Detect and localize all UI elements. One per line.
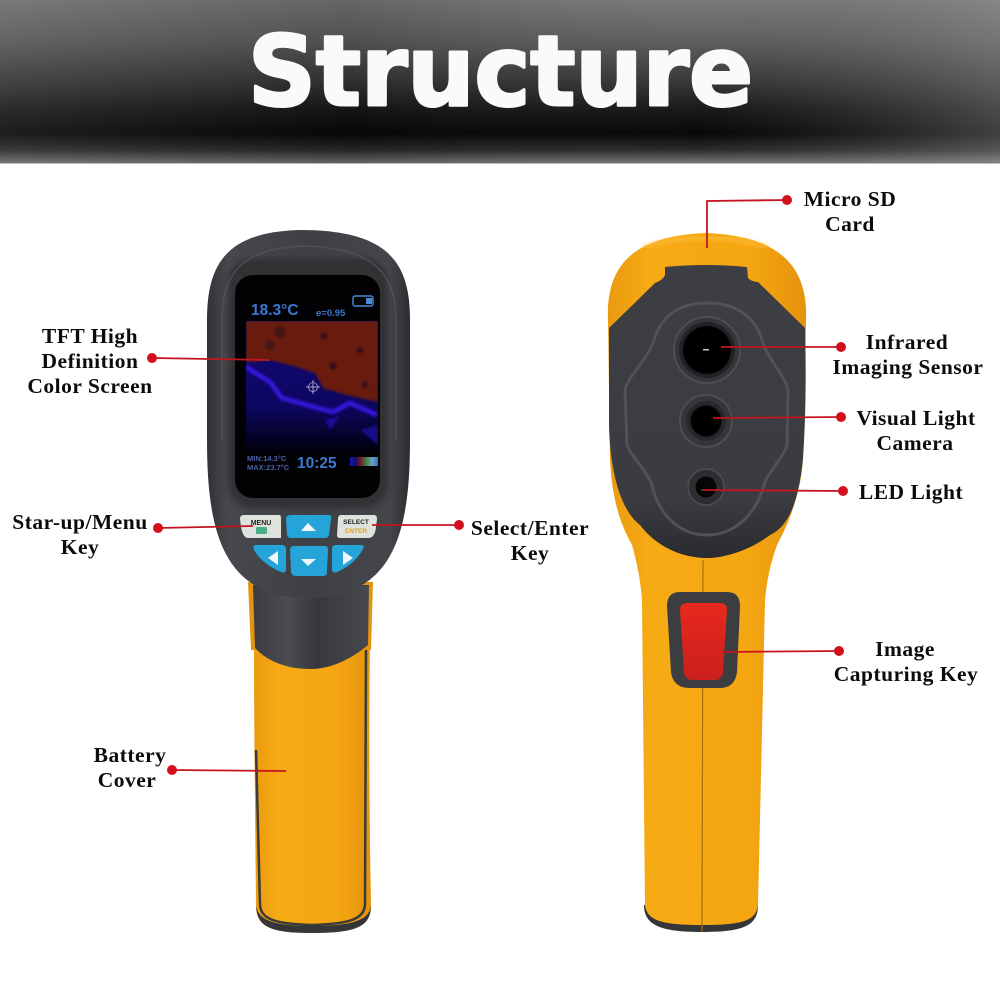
device: rear view [608, 233, 806, 932]
callout: select enter key: Key [511, 541, 549, 565]
visual light camera lens [680, 395, 732, 447]
callout: image capturing key: Image [875, 637, 935, 661]
image capturing key [667, 592, 740, 688]
menu key: MENU [251, 520, 271, 527]
callout: start-up menu key: Key [61, 535, 99, 559]
callout: infrared imaging sensor: Infrared [866, 330, 948, 354]
thermal image [246, 321, 378, 453]
min max readout [247, 454, 290, 472]
colour scale [350, 457, 378, 466]
callout: image capturing key [722, 637, 978, 686]
neck [253, 585, 369, 669]
callout: TFT screen: TFT High [42, 324, 138, 348]
clock: 10:25 [297, 455, 337, 472]
callout: select enter key: Select/Enter [471, 516, 589, 540]
callout: LED light: LED Light [859, 480, 963, 504]
callout: visual light camera: Camera [876, 431, 954, 455]
keypad [240, 515, 377, 576]
title: Structure [248, 15, 753, 128]
rear dark panel [609, 265, 806, 558]
callout: visual light camera [713, 406, 976, 455]
callout: LED light [703, 480, 963, 504]
select enter key: SELECT [343, 519, 369, 526]
callout: battery cover [94, 743, 286, 792]
callout: select enter key [372, 516, 589, 565]
head shell [207, 230, 410, 598]
min max readout: MIN:14.3°C [247, 454, 287, 463]
callout: image capturing key: Capturing Key [834, 662, 978, 686]
callout: visual light camera: Visual Light [856, 406, 976, 430]
callout: TFT screen: Color Screen [27, 374, 153, 398]
callout: TFT screen [27, 324, 270, 398]
left key [253, 545, 286, 573]
select enter key: ENTER [345, 528, 367, 535]
screen [235, 275, 380, 498]
device: front view [207, 230, 410, 933]
up key [286, 515, 331, 538]
header banner [0, 0, 1000, 164]
callout: micro SD card: Card [825, 212, 875, 236]
dark base rim [644, 905, 758, 932]
emissivity reading: e=0.95 [316, 308, 346, 319]
right key [332, 545, 364, 573]
grip: battery cover [254, 640, 371, 933]
callout: battery cover: Cover [98, 768, 156, 792]
callout: start-up menu key [12, 510, 253, 559]
yellow slivers behind neck [248, 582, 373, 650]
callout: micro SD card [707, 187, 896, 248]
callout: infrared imaging sensor [721, 330, 983, 379]
down key [290, 546, 328, 576]
infrared imaging sensor lens [674, 317, 740, 383]
callout: micro SD card: Micro SD [804, 187, 896, 211]
callout: battery cover: Battery [94, 743, 166, 767]
LED light [688, 469, 724, 505]
temperature reading: 18.3°C [251, 302, 299, 319]
callout: start-up menu key: Star-up/Menu [12, 510, 148, 534]
select enter key [337, 515, 377, 538]
battery icon [353, 296, 373, 306]
callout: infrared imaging sensor: Imaging Sensor [833, 355, 983, 379]
yellow body [608, 233, 806, 925]
callout: TFT screen: Definition [42, 349, 138, 373]
min max readout: MAX:23.7°C [247, 463, 290, 472]
darker recess around screen [228, 258, 388, 508]
